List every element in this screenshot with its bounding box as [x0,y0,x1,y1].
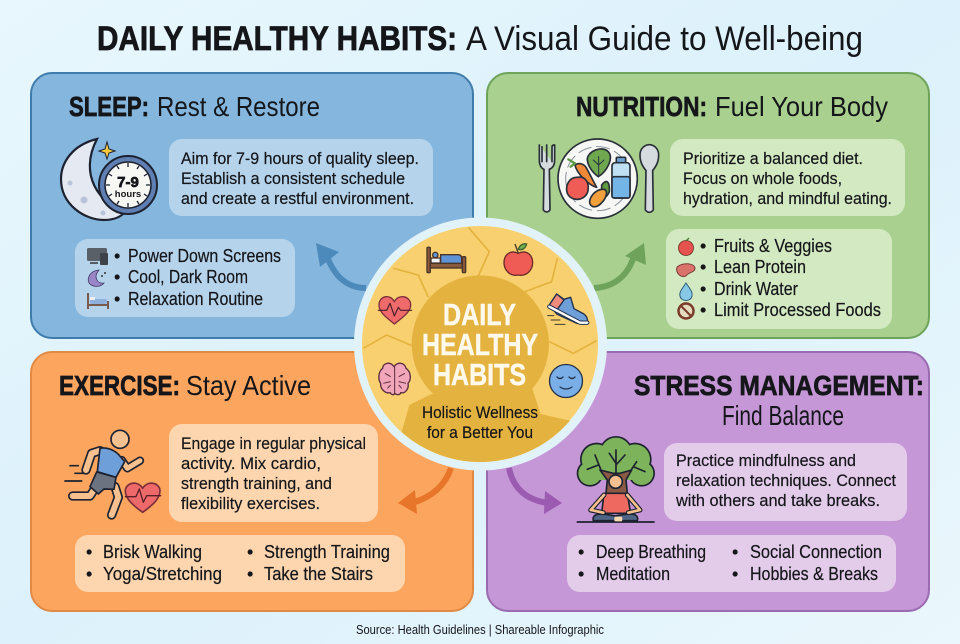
title [97,20,863,58]
sleep description box: and create a restful environment. [181,189,414,208]
exercise heading [59,370,311,401]
exercise tips list: Yoga/Stretching [103,564,222,584]
nutrition tips list: • [700,257,706,277]
icon: bed [88,293,108,309]
nutrition description box: Prioritize a balanced diet. [683,149,863,168]
hub title: DAILY [443,297,516,332]
nutrition tips list: • [700,279,706,299]
sleep tips list: Power Down Screens [128,246,281,266]
stress heading: STRESS MANAGEMENT: [634,370,924,401]
stress description box: relaxation techniques. Connect [676,471,896,490]
stress heading: Find Balance [722,400,844,431]
exercise description box: flexibility exercises. [181,494,320,513]
nutrition heading [576,91,888,122]
nutrition tips list: Limit Processed Foods [714,300,881,320]
sleep description box: Aim for 7-9 hours of quality sleep. [181,149,419,168]
sleep heading: SLEEP: [69,91,149,122]
nutrition tips list: • [700,300,706,320]
exercise tips list: Take the Stairs [264,564,373,584]
exercise tips list: Brisk Walking [103,542,202,562]
stress tips list: Meditation [596,564,670,584]
icon: runner with heart [65,430,161,515]
central hub [354,218,607,470]
exercise heading: Stay Active [186,370,311,401]
stress tips list: Deep Breathing [596,542,706,562]
sleep tips list: Relaxation Routine [128,289,263,309]
sleep tips list: • [114,246,120,266]
exercise tips list: • [86,542,92,562]
stress tips list: • [732,564,738,584]
icon: moon and clock: hours [115,189,141,200]
hub segments [363,227,597,462]
icon: running shoe [548,294,587,324]
title: A Visual Guide to Well-being [466,20,863,58]
exercise description box: Engage in regular physical [181,434,366,453]
arrow: to sleep [316,243,366,288]
nutrition tips list: Lean Protein [714,257,806,277]
stress heading [634,370,924,431]
icon: moon and clock [61,139,157,220]
sleep tips list: Cool, Dark Room [128,267,248,287]
nutrition tips list: • [700,236,706,256]
sleep description box [169,139,433,216]
arrow: to exercise [398,468,451,514]
stress tips list: • [732,542,738,562]
icon: moon [88,270,106,286]
arrow: to nutrition [594,243,646,288]
nutrition heading: Fuel Your Body [715,91,888,122]
icon: heartbeat [378,297,412,324]
stress tips list: • [578,542,584,562]
exercise tips list [75,535,405,592]
icon: plate with fork and spoon [539,139,659,218]
sleep description box: Establish a consistent schedule [181,169,405,188]
nutrition tips list: Fruits & Veggies [714,236,832,256]
hub subtitle: for a Better You [427,423,533,442]
nutrition heading: NUTRITION: [576,91,707,122]
nutrition description box: hydration, and mindful eating. [683,189,892,208]
sleep heading [69,91,320,122]
nutrition tips list [666,229,892,329]
hub subtitle [422,403,538,442]
icon: smiling face [550,364,582,398]
sleep heading: Rest & Restore [157,91,320,122]
sleep tips list: • [114,289,120,309]
icon: moon and clock: 7-9 [117,174,139,191]
arrow: to stress management [509,468,562,514]
nutrition description box: Focus on whole foods, [683,169,842,188]
stress tips list: Hobbies & Breaks [750,564,878,584]
nutrition tips list: Drink Water [714,279,798,299]
panel: nutrition [487,73,929,338]
panel: sleep [31,73,473,338]
icon: brain [379,363,410,395]
icon: meditating person under tree [577,436,655,522]
nutrition description box [670,139,905,216]
exercise description box: strength training, and [181,474,332,493]
hub title: HABITS [433,357,526,392]
title: DAILY HEALTHY HABITS: [97,20,457,58]
icon: steak [677,264,695,276]
sleep tips list: • [114,267,120,287]
stress tips list [567,535,896,592]
icon: no processed food [678,304,694,318]
icon: bed [427,247,466,273]
icon: water drop [680,283,692,300]
panel: stress management [487,352,929,611]
stress tips list: Social Connection [750,542,882,562]
exercise tips list: • [247,542,253,562]
icon: screens [87,248,108,265]
stress description box: Practice mindfulness and [676,451,856,470]
exercise description box [169,424,378,522]
exercise description box: activity. Mix cardio, [181,454,321,473]
panel: exercise [31,352,473,611]
exercise heading: EXERCISE: [59,370,180,401]
stress description box [664,443,907,521]
icon: apple [678,238,694,256]
source line: Source: Health Guidelines | Shareable Infographic [356,623,604,637]
stress description box: with others and take breaks. [675,491,880,510]
exercise tips list: • [247,564,253,584]
hub subtitle: Holistic Wellness [422,403,538,422]
hub title [422,297,538,392]
sleep tips list [75,239,295,317]
hub title: HEALTHY [422,327,538,362]
stress tips list: • [578,564,584,584]
exercise tips list: Strength Training [264,542,390,562]
exercise tips list: • [86,564,92,584]
icon: apple [504,244,533,275]
